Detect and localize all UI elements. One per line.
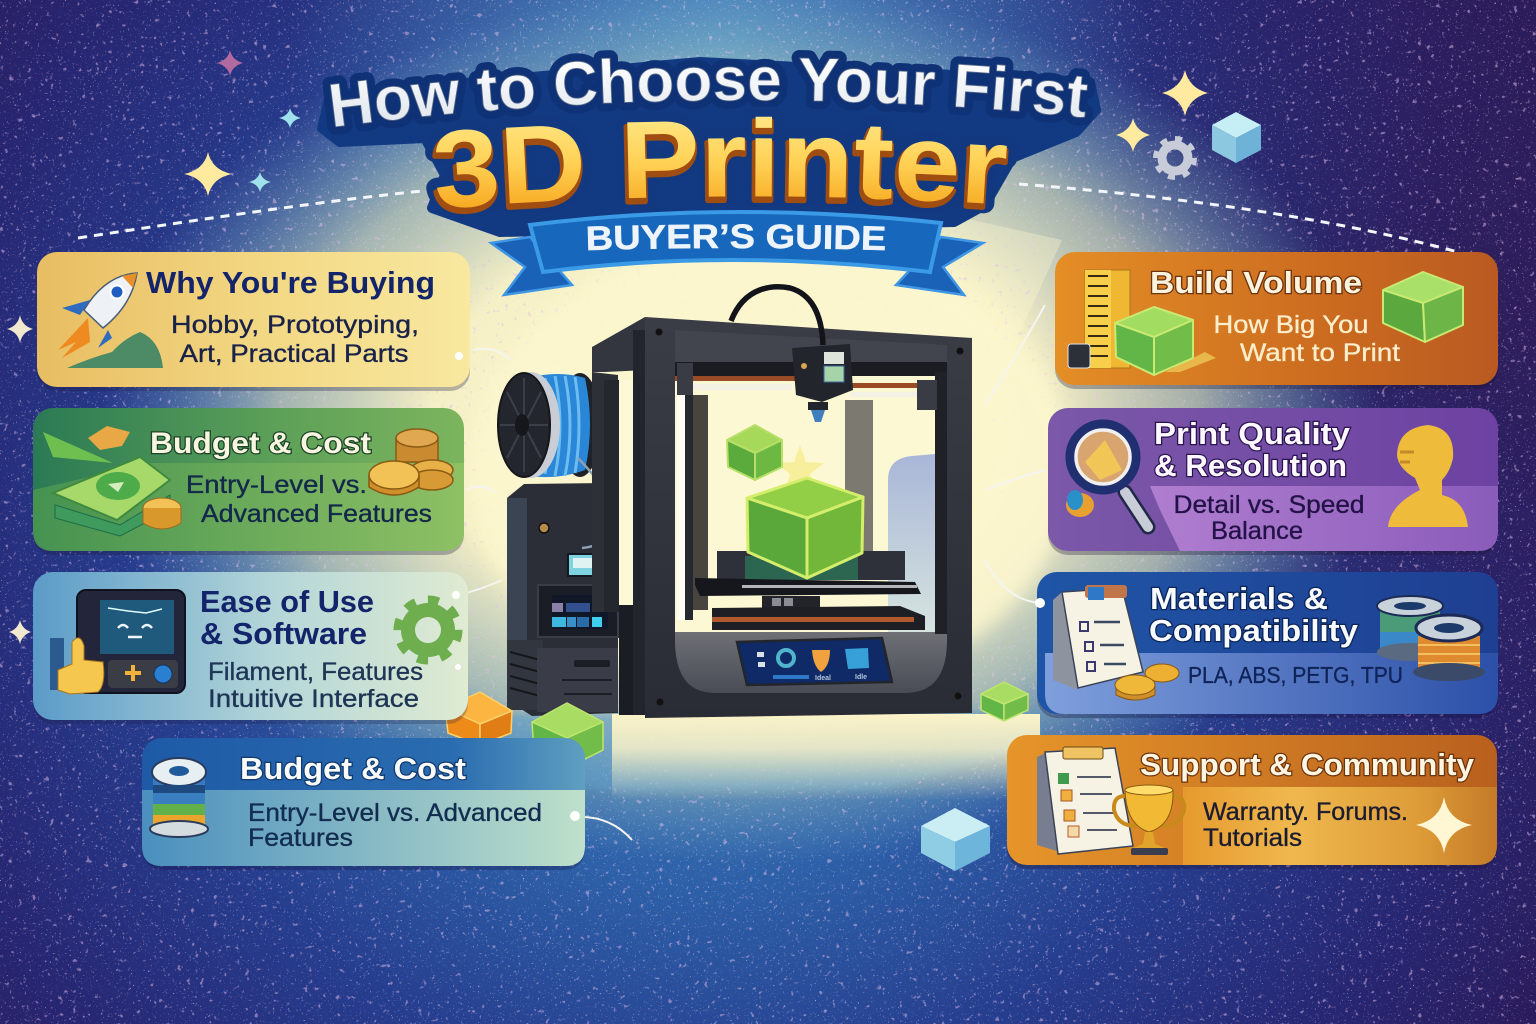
- heading: Support & Community: [1140, 747, 1475, 782]
- panel: budget and cost green: Advanced Features: [201, 500, 432, 528]
- panel: print quality: Balance: [1211, 517, 1303, 545]
- panel: ease of use: [33, 572, 468, 724]
- text: Detail vs. Speed: [1174, 491, 1364, 519]
- icon: spools: [1377, 596, 1485, 681]
- decorative stars: [7, 50, 1208, 644]
- text: Entry-Level vs.: [186, 471, 367, 499]
- panel: support: Tutorials: [1203, 824, 1302, 852]
- panel: materials: [1035, 572, 1498, 718]
- panel: why you're buying: [37, 252, 470, 391]
- panel: build volume: [1055, 252, 1498, 389]
- icon: notepad: [1053, 585, 1179, 700]
- build plate: [695, 551, 925, 630]
- title line 1: How to Choose Your First: [330, 58, 1088, 128]
- icon: money stack: [43, 426, 181, 536]
- panel: support: [1007, 735, 1497, 869]
- filament tower: [507, 483, 618, 716]
- icon: ruler and cube: [1068, 270, 1216, 375]
- green cube front: [532, 703, 603, 768]
- icon: tablet with thumb: [50, 590, 185, 694]
- orange cube: [445, 692, 512, 745]
- heading: Why You're Buying: [146, 265, 435, 300]
- icon: clipboard: [1037, 747, 1133, 854]
- panel: print quality: & Resolution: [1154, 448, 1347, 483]
- panel: why you're buying: Art, Practical Parts: [180, 340, 408, 368]
- panel: ease of use: & Software: [200, 616, 367, 651]
- scattered cubes: [445, 682, 1028, 871]
- heading: Build Volume: [1150, 265, 1362, 300]
- print head with cable: [731, 287, 853, 422]
- panel: materials: Compatibility: [1149, 613, 1359, 648]
- floating green cube: [727, 425, 782, 480]
- heading: Budget & Cost: [240, 751, 466, 786]
- small green cube right: [981, 682, 1028, 721]
- heading: Print Quality: [1154, 416, 1351, 451]
- title banner: [317, 50, 1101, 237]
- icon: trophy: [1114, 785, 1184, 855]
- icon: green cube: [1383, 272, 1463, 342]
- x-axis gantry: [675, 363, 937, 410]
- heading: Ease of Use: [200, 584, 374, 619]
- icon: gear: [1156, 139, 1194, 177]
- text: Entry-Level vs. Advanced: [248, 799, 542, 827]
- heading: Budget & Cost: [150, 427, 371, 460]
- panel: build volume: Want to Print: [1240, 339, 1400, 367]
- icon: golden bust: [1388, 425, 1468, 527]
- pale blue cube: [921, 808, 990, 871]
- text: How Big You: [1214, 311, 1368, 339]
- icon: coins: [369, 429, 453, 495]
- filament spool: [498, 372, 615, 548]
- printer assembly: [498, 287, 972, 718]
- printer frame: Idle: [855, 674, 867, 681]
- dashed arc left: [78, 190, 432, 238]
- icon: green gear: [398, 600, 458, 660]
- icon: rocket: [58, 273, 163, 368]
- icon: magnifier: [1066, 424, 1148, 527]
- panel: ease of use: Intuitive Interface: [208, 685, 419, 713]
- heading: Materials &: [1150, 581, 1328, 616]
- icon: filament stack: [150, 758, 208, 837]
- title line 2: 3D Printer: [432, 118, 1008, 214]
- panel: budget and cost green: [33, 408, 464, 555]
- printer frame: Ideal: [815, 675, 831, 682]
- printer frame: [592, 317, 972, 718]
- title line 2: 3D Printer: [425, 107, 1016, 214]
- text: Warranty. Forums.: [1203, 798, 1408, 826]
- text: Filament, Features: [208, 658, 423, 686]
- subtitle ribbon: BUYER’S GUIDE: [588, 224, 885, 250]
- connectors: [458, 305, 1045, 840]
- dashed arc right: [1019, 184, 1458, 252]
- title line 2: 3D Printer: [436, 116, 1007, 208]
- title line 1: How to Choose Your First: [322, 50, 1096, 135]
- icon: sparkle: [1416, 797, 1472, 853]
- panel: print quality: [1048, 408, 1498, 555]
- icon: light blue cube: [1212, 112, 1261, 163]
- panel: budget and cost blue: Features: [248, 824, 353, 852]
- text: PLA, ABS, PETG, TPU: [1188, 662, 1403, 688]
- printed green cube: [747, 478, 863, 578]
- subtitle ribbon: [488, 210, 986, 297]
- panel: budget and cost blue: [142, 738, 585, 870]
- text: Hobby, Prototyping,: [171, 311, 419, 339]
